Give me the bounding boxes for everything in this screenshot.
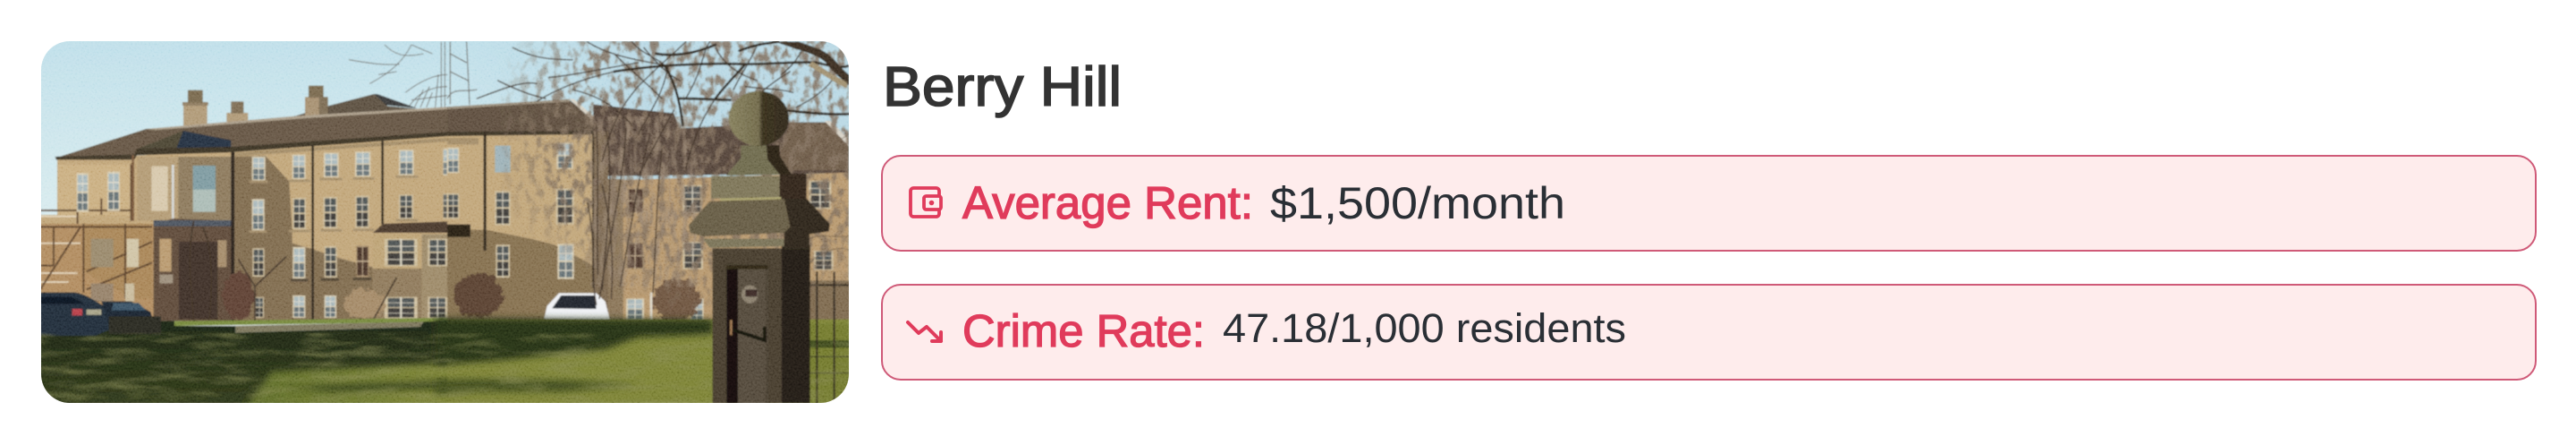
wall right — [445, 133, 594, 265]
hanging ivy branches — [590, 116, 698, 287]
card: average rent — [882, 156, 2536, 251]
bay roof — [140, 131, 183, 149]
card: crime rate — [882, 285, 2536, 380]
eaves line — [55, 132, 447, 159]
cap — [703, 239, 785, 248]
back roof — [295, 93, 416, 116]
label: Average Rent: Average Rent: — [962, 177, 1253, 228]
icon: trending down arrow — [908, 322, 941, 341]
pipes — [484, 132, 487, 251]
bay — [137, 157, 179, 221]
conservatory — [154, 218, 234, 321]
ball finial — [729, 91, 789, 146]
sky — [41, 41, 551, 333]
stone and foliage grain — [41, 41, 849, 403]
main roof end — [447, 100, 597, 133]
mast — [447, 42, 477, 105]
icon: wallet — [911, 188, 941, 217]
cars — [40, 293, 109, 336]
main wall — [40, 136, 447, 321]
value: rent: $1,500/month — [1270, 178, 1565, 228]
shadow — [447, 230, 593, 321]
low bay — [372, 267, 379, 270]
tree branches — [477, 42, 832, 304]
left wing — [58, 165, 134, 216]
shrubs — [454, 273, 700, 321]
value: crime rate: 47.18/1,000 residents — [1223, 305, 1626, 351]
back wing — [593, 105, 849, 176]
white car — [544, 293, 610, 320]
chimneys — [182, 86, 328, 127]
pole — [171, 164, 175, 220]
gate post — [689, 91, 830, 404]
ground band — [174, 318, 447, 326]
windows front — [252, 149, 447, 318]
photo: Berry Hill building — [40, 41, 850, 409]
shrubs — [222, 271, 386, 320]
scaffolding annex — [40, 224, 154, 321]
tree canopy twigs — [501, 41, 849, 310]
grass texture — [41, 333, 849, 403]
heading: Berry Hill: Berry Hill — [883, 56, 1122, 118]
windows right — [447, 142, 834, 321]
label: Crime Rate: Crime Rate: — [962, 305, 1205, 356]
lawn right — [447, 320, 850, 405]
shadow on wall — [234, 156, 374, 321]
main roof — [55, 107, 447, 158]
lawn — [40, 321, 447, 405]
gate area right — [809, 280, 850, 321]
neck — [726, 145, 781, 175]
drainpipes — [311, 146, 314, 321]
background trees and mast — [349, 42, 447, 107]
left windows — [77, 173, 89, 212]
window sills — [250, 175, 418, 281]
